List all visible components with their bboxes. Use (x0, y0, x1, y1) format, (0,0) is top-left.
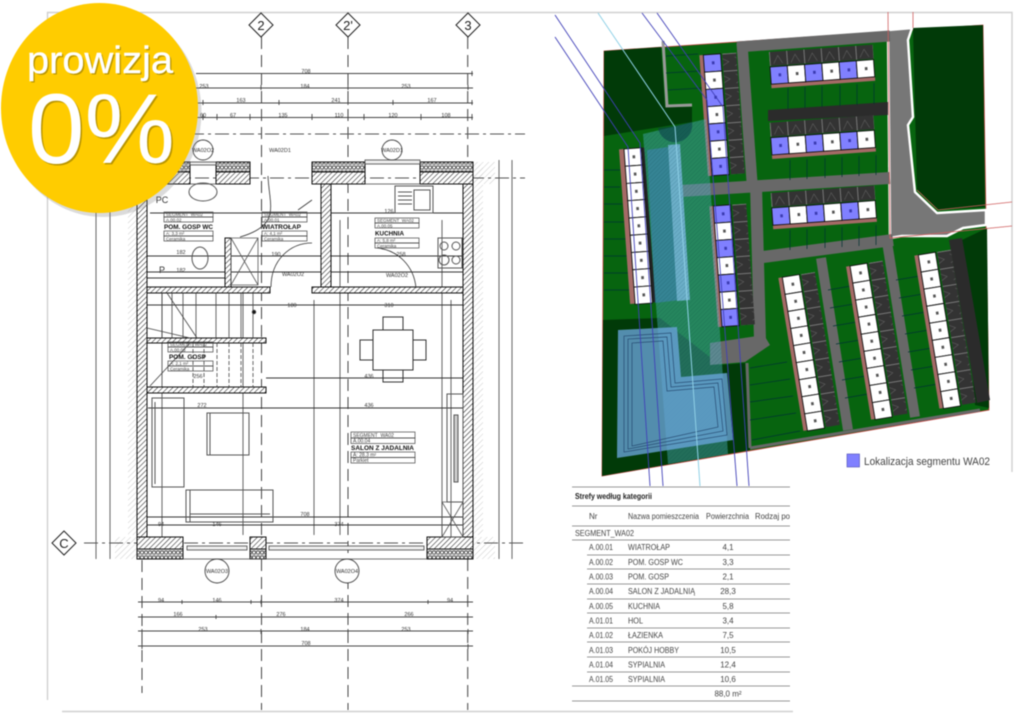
dimension numbers: 180 (287, 303, 297, 309)
left sofa (152, 398, 184, 487)
column of houses F (914, 250, 976, 409)
table body (575, 529, 742, 698)
red boundary lines (888, 12, 1012, 238)
main road (888, 28, 986, 238)
section circles: WA02O2 (192, 148, 214, 154)
bottom dimensions: 166 (173, 612, 183, 618)
top dimensions: 108 (441, 113, 451, 119)
doors (240, 176, 416, 288)
curbs (888, 47, 895, 237)
row of houses B (770, 115, 876, 159)
room label: SALON Z JADALNIA: A: 28,3 m² (353, 452, 376, 458)
dimension numbers: 182 (176, 268, 186, 274)
section circles (156, 140, 408, 583)
table header: Powierzchnia (706, 512, 749, 521)
badge: prowizja 0% (1, 3, 202, 217)
site plan (555, 12, 1012, 486)
table body: A.01.05 (589, 675, 613, 684)
table body: A.01.04 (589, 660, 613, 670)
parking strip under overlay (647, 147, 680, 303)
axis markers (52, 13, 480, 555)
dimension numbers: 272 (197, 403, 207, 409)
lot lines (604, 54, 938, 440)
room label: SALON Z JADALNIA: SEGMENT_WA02 (353, 433, 394, 439)
top dimensions: 110 (335, 113, 343, 119)
hob (438, 238, 462, 268)
room label: WIATROŁAP (262, 212, 307, 242)
table body: 4,1 (722, 543, 734, 552)
room label: SALON Z JADALNIA: SALON Z JADALNIA (351, 445, 414, 452)
top dimensions (196, 69, 473, 120)
windows (187, 160, 424, 550)
table body: WIATROŁAP (628, 543, 670, 552)
section circles: WA02O2 (282, 272, 304, 278)
room label: KUCHNIA (375, 218, 419, 248)
table body: A.00.04 (589, 587, 613, 596)
axis markers: 2 (257, 18, 265, 33)
dark parking (768, 102, 990, 403)
walls (137, 162, 473, 559)
room label: POM. GOSP: A.00.03 (170, 348, 186, 352)
table body: A.00.01 (589, 543, 613, 552)
badge: prowizja 0%: prowizja (28, 42, 175, 84)
table header: Nr (589, 512, 598, 521)
axis markers: C (59, 536, 69, 551)
table body: 3,3 (722, 558, 734, 567)
row of houses A (769, 45, 875, 88)
bottom dimensions: 266 (404, 612, 414, 618)
dimension numbers: 126 (384, 209, 394, 215)
column of houses E (846, 261, 908, 420)
table header: Nazwa pomieszczenia (628, 512, 699, 521)
table body: SEGMENT_WA02 (575, 529, 634, 538)
green plot (602, 25, 989, 476)
table body: 7,5 (722, 631, 734, 640)
dimension numbers: 436 (364, 403, 374, 409)
table body: SALON Z JADALNIĄ (628, 587, 696, 596)
top dimensions: 163 (236, 98, 246, 104)
bottom sofa (186, 490, 273, 522)
top dimensions: 253 (199, 84, 209, 90)
room label: KUCHNIA: Ceramika (377, 244, 397, 248)
X shaft (231, 238, 258, 285)
table body: POM. GOSP (628, 572, 669, 582)
axis markers: 2' (343, 18, 353, 33)
room label: KUCHNIA: KUCHNIA (375, 232, 405, 238)
top dimensions: 253 (401, 84, 411, 90)
room label: POM. GOSP: Ceramika (170, 366, 190, 372)
room label: POM. GOSP WC: A.00.02 (166, 218, 182, 222)
cyan line (598, 13, 700, 486)
room table (572, 487, 791, 701)
dimension numbers: 708 (300, 512, 310, 518)
room label: KUCHNIA: A: 5,8 m² (377, 238, 396, 243)
top dimensions: 167 (427, 98, 437, 104)
section circles: WA02O3 (206, 569, 228, 575)
table body: 88,0 m² (714, 690, 742, 698)
bottom dimensions: 146 (212, 598, 222, 604)
table body: A.01.01 (589, 616, 613, 626)
dimension numbers: 190 (271, 252, 281, 258)
bottom dimensions (138, 598, 473, 649)
badge: prowizja 0%: 0% (30, 74, 176, 186)
section circles: WA02D1 (381, 148, 403, 154)
utility lines (555, 13, 749, 486)
top dimensions: 120 (388, 113, 398, 119)
shadow walls (115, 162, 495, 559)
table header: Rodzaj po (755, 512, 791, 521)
section circles: WA02O2 (386, 273, 408, 279)
bottom dimensions: 708 (301, 641, 311, 647)
dimension numbers (158, 209, 406, 528)
table rules (572, 487, 790, 701)
top dimensions: 184 (300, 84, 310, 90)
bottom dimensions: 94 (158, 598, 164, 604)
tv cabinet (447, 394, 463, 502)
table body: 12,4 (720, 660, 736, 670)
table body: SYPIALNIA (628, 660, 666, 670)
room label: POM. GOSP WC (164, 212, 214, 242)
room label: POM. GOSP WC: A: 3,3 m² (166, 231, 185, 236)
table body: POM. GOSP WC (628, 558, 683, 567)
closet X (442, 502, 463, 537)
table body: A.01.02 (589, 631, 613, 640)
access roads (663, 36, 980, 448)
room label: WIATROŁAP: WIATROŁAP (262, 225, 301, 231)
tunnel overlay band (643, 119, 728, 464)
axis markers: 3 (464, 18, 472, 33)
bottom dimensions: 253 (401, 627, 411, 633)
badge: prowizja 0%: 0% (28, 73, 175, 184)
room label: WIATROŁAP: A: 4,1 m² (264, 231, 283, 236)
washbasin (189, 183, 217, 201)
table body: A.00.03 (589, 572, 613, 582)
table body: SYPIALNIA (628, 675, 666, 684)
dining set (360, 317, 426, 382)
interior dimension lines (147, 213, 470, 525)
room label: POM. GOSP WC: SEGMENT_WA02 (166, 212, 203, 217)
room label: POM. GOSP: A: 2,1 m² (170, 361, 189, 366)
dimension numbers: 182 (176, 250, 186, 256)
table body: 3,4 (722, 616, 734, 626)
dimension numbers: 374 (334, 522, 344, 528)
cul-de-sac (710, 335, 770, 365)
room label: POM. GOSP: SEGMENT_WA02 (170, 342, 207, 347)
central road under overlay (668, 144, 690, 301)
bottom dimensions: 276 (276, 612, 286, 618)
room label: WIATROŁAP: A.00.01 (264, 218, 280, 222)
table body: 2,1 (722, 572, 734, 582)
stairs (147, 293, 256, 387)
bottom dimensions: 184 (300, 627, 310, 633)
room label: POM. GOSP (168, 342, 213, 372)
dimension numbers: 436 (364, 374, 374, 380)
table body: POKÓJ HOBBY (628, 646, 680, 655)
furniture (152, 183, 463, 537)
dark green areas (602, 25, 989, 476)
room label: KUCHNIA: A.00.05 (377, 224, 393, 228)
room label: SALON Z JADALNIA: Parkiet (353, 458, 369, 464)
table body: A.00.05 (589, 602, 613, 611)
room label: SALON Z JADALNIA: A.00.04 (353, 438, 370, 444)
dimension numbers: 256 (193, 374, 203, 380)
legend: Lokalizacja segmentu WA02 (864, 456, 990, 468)
top dimensions: 60 (200, 113, 206, 119)
section circles: WA02O4 (336, 569, 358, 575)
dimension numbers: 94 (158, 522, 164, 528)
column of houses left (619, 148, 655, 305)
retention pond (617, 327, 733, 458)
room label: POM. GOSP: POM. GOSP (169, 355, 206, 361)
turnaround fan (658, 122, 692, 142)
table body: A.01.03 (589, 646, 613, 655)
table body: ŁAZIENKA (628, 631, 664, 640)
bottom dimensions: 94 (447, 598, 453, 604)
room label: WIATROŁAP: SEGMENT_WA02 (264, 212, 301, 217)
grid axes (142, 37, 468, 710)
column of houses top (699, 53, 745, 176)
table body: KUCHNIA (628, 602, 661, 611)
top dimensions: 241 (331, 98, 341, 104)
room label: KUCHNIA: SEGMENT_WA02 (377, 218, 414, 223)
column of houses D (778, 272, 840, 432)
table header (589, 512, 791, 521)
kitchen sink (395, 186, 433, 213)
dimension numbers: 310 (384, 303, 394, 309)
top dimensions: 135 (278, 113, 288, 119)
bottom dimensions: 253 (198, 627, 208, 633)
tv (454, 415, 458, 482)
coffee table (207, 413, 249, 455)
horizontal axes (84, 134, 525, 543)
room label: WIATROŁAP: Ceramika (264, 236, 284, 242)
table body: A.00.02 (589, 558, 613, 567)
room label: POM. GOSP WC: Ceramika (166, 236, 186, 242)
room label: SALON Z JADALNIA (351, 432, 415, 464)
badge: prowizja 0%: prowizja (27, 40, 174, 82)
table body: HOL (628, 616, 643, 626)
table title: Strefy według kategorii (575, 492, 652, 501)
dimension numbers: 146 (212, 522, 222, 528)
column of houses middle (709, 204, 755, 327)
row of houses C (771, 186, 877, 229)
floor plan (52, 13, 525, 710)
section circles: P (159, 265, 165, 275)
room label: POM. GOSP WC: POM. GOSP WC (164, 225, 214, 231)
toilet (192, 247, 208, 269)
top dimensions: 708 (301, 69, 311, 75)
bottom dimensions: 374 (334, 598, 344, 604)
section circles: WA02D1 (269, 148, 291, 154)
section circles: PC (156, 195, 169, 205)
dimension numbers: 258 (396, 252, 406, 258)
table body: 10,6 (720, 675, 736, 684)
table body: 28,3 (720, 587, 736, 596)
top dimensions: 67 (230, 113, 236, 119)
table body: 5,8 (722, 602, 734, 611)
side dimensions (96, 160, 512, 559)
table body: 10,5 (720, 646, 736, 655)
